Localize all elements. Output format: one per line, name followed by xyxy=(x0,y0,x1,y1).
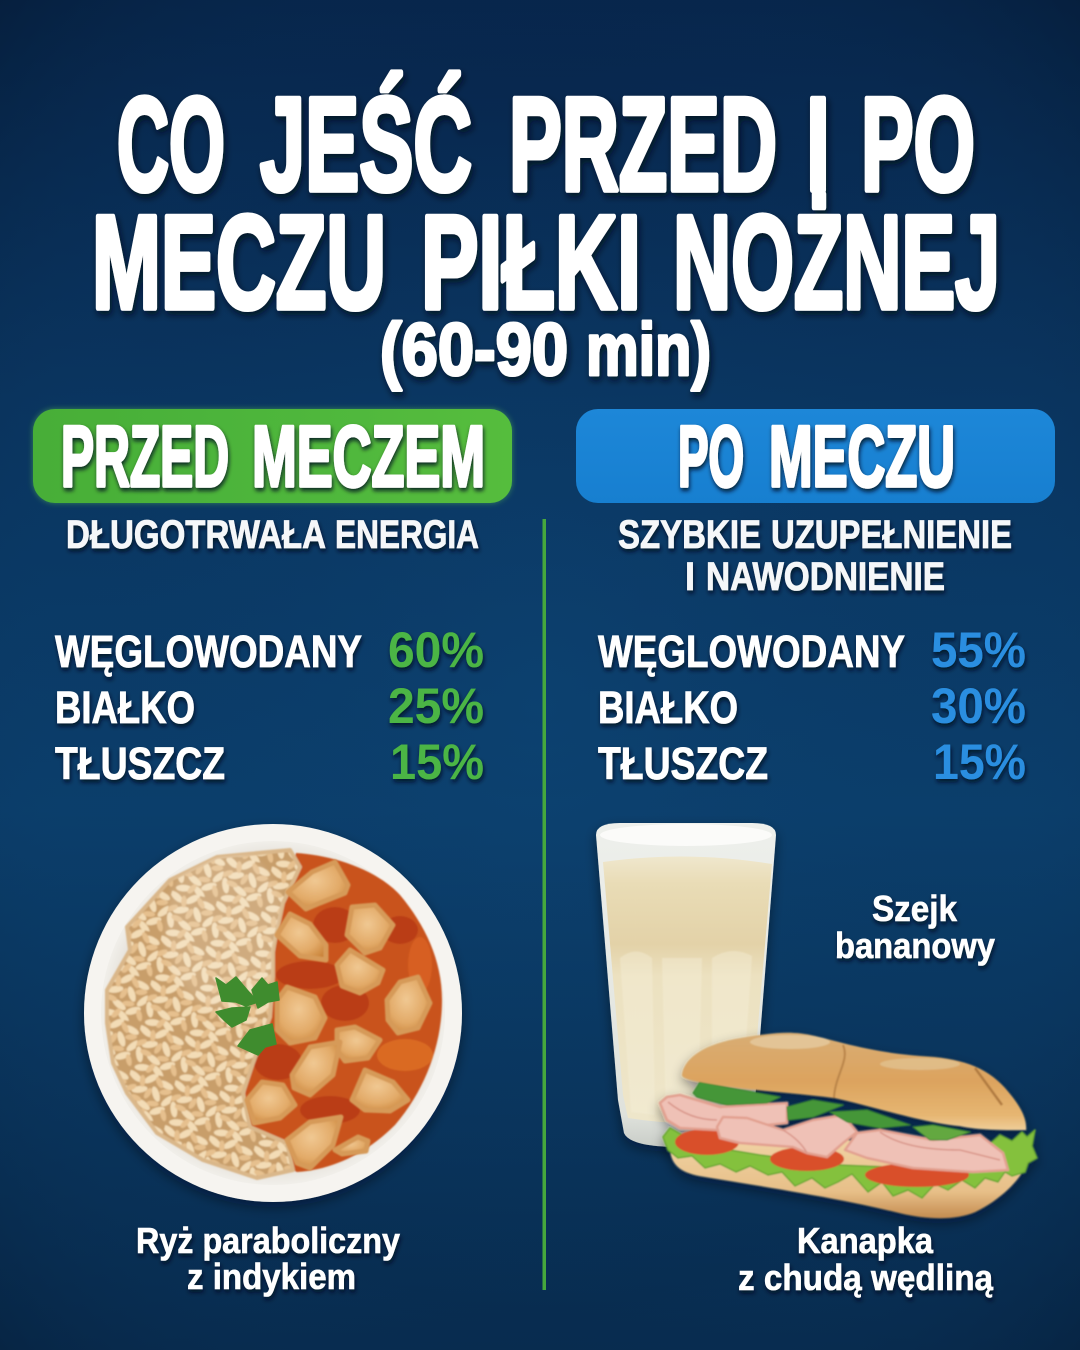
macros: przed meczem: 60% xyxy=(388,622,484,678)
panel: przed meczem header: PRZED xyxy=(61,409,229,505)
macros: przed meczem xyxy=(55,622,484,790)
subtitle xyxy=(380,308,711,391)
lettuce xyxy=(663,1128,1037,1198)
divider xyxy=(542,519,546,1290)
caption: sandwich: Kanapka xyxy=(797,1220,934,1261)
caption: rice: z indykiem xyxy=(187,1256,356,1297)
subheading: po: NAWODNIENIE xyxy=(706,555,945,599)
subtitle: min) xyxy=(586,308,711,391)
macros: po meczu: 55% xyxy=(931,622,1026,678)
macros: przed meczem: 25% xyxy=(388,678,484,734)
title: I xyxy=(806,71,830,219)
title: PO xyxy=(861,71,975,219)
title: PIŁKI xyxy=(421,189,641,337)
caption: shake: bananowy xyxy=(835,925,995,966)
caption: sandwich xyxy=(738,1220,994,1298)
panel: po meczu header xyxy=(576,409,1055,505)
macros: po meczu: 15% xyxy=(933,734,1026,790)
green leaves xyxy=(693,1082,970,1140)
macros: przed meczem: BIAŁKO xyxy=(55,682,195,733)
panel: przed meczem header: MECZEM xyxy=(252,409,485,505)
title: CO xyxy=(117,71,225,219)
macros: po meczu: WĘGLOWODANY xyxy=(598,626,905,677)
macros: po meczu xyxy=(598,622,1026,790)
subheading: po: I xyxy=(685,555,695,599)
subheading: po xyxy=(618,513,1012,599)
title: PRZED xyxy=(509,71,777,219)
chicken pieces xyxy=(247,862,430,1168)
parsley garnish xyxy=(216,977,279,1055)
ham slices xyxy=(660,1095,1008,1172)
title: JEŚĆ xyxy=(260,71,472,219)
illustration: bowl of rice with turkey xyxy=(84,824,462,1202)
caption: rice: Ryż paraboliczny xyxy=(136,1220,400,1261)
panel: po meczu header: PO xyxy=(678,409,744,505)
macros: przed meczem: TŁUSZCZ xyxy=(55,738,225,789)
title xyxy=(92,71,1000,337)
macros: po meczu: TŁUSZCZ xyxy=(598,738,768,789)
macros: przed meczem: 15% xyxy=(390,734,484,790)
subtitle: (60-90 xyxy=(380,308,568,391)
caption: shake xyxy=(835,888,995,966)
subheading: po: SZYBKIE xyxy=(618,513,761,557)
panel: po meczu header: MECZU xyxy=(769,409,955,505)
illustration: glass of banana shake xyxy=(596,823,776,1147)
subheading: po: UZUPEŁNIENIE xyxy=(771,513,1012,557)
panel: przed meczem header xyxy=(33,409,512,505)
macros: po meczu: BIAŁKO xyxy=(598,682,738,733)
tomatoes xyxy=(675,1129,969,1187)
caption: shake: Szejk xyxy=(872,888,958,929)
title: MECZU xyxy=(92,189,386,337)
macros: po meczu: 30% xyxy=(931,678,1026,734)
top bun xyxy=(682,1033,1026,1130)
subheading: przed: DŁUGOTRWAŁA xyxy=(66,513,326,557)
macros: przed meczem: WĘGLOWODANY xyxy=(55,626,362,677)
subheading: przed: ENERGIA xyxy=(335,513,479,557)
caption: rice xyxy=(136,1220,400,1297)
caption: sandwich: z chudą wędliną xyxy=(738,1257,994,1298)
illustration: ham sandwich xyxy=(660,1033,1037,1218)
